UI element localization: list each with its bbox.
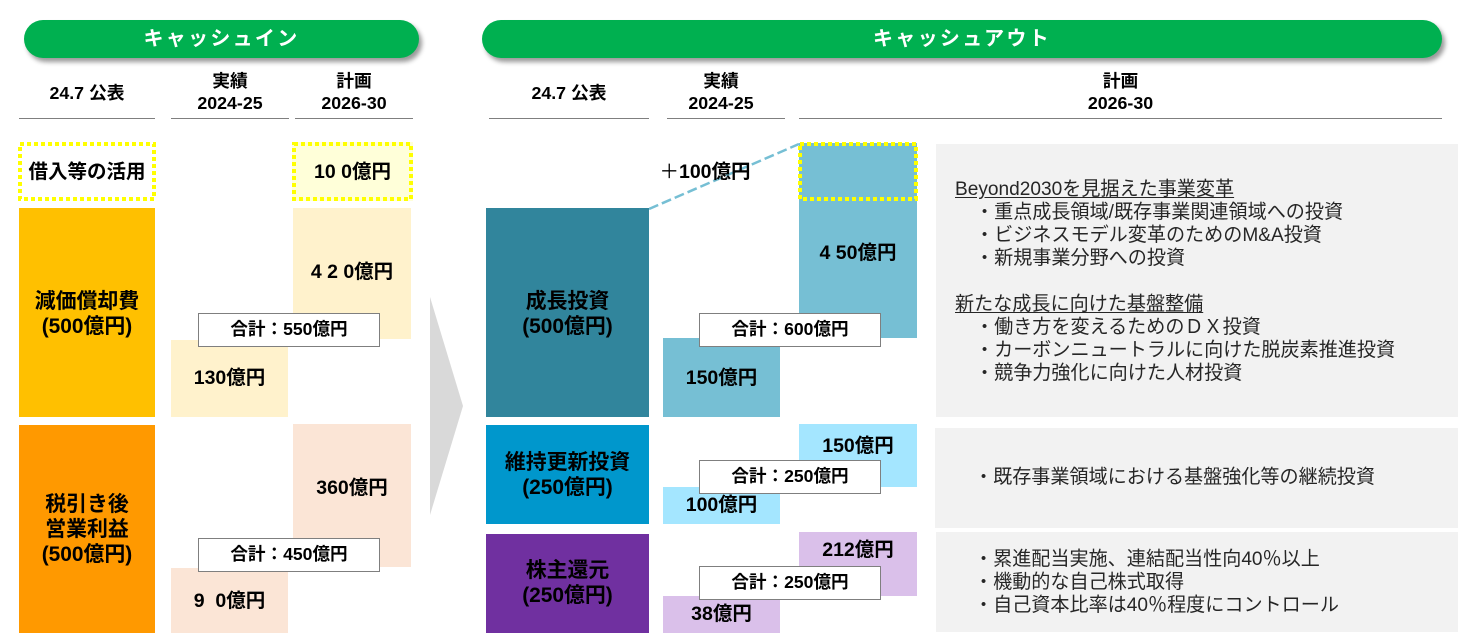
panel: growth investment details	[936, 144, 1458, 417]
maintenance investment block: (250億円)	[522, 476, 613, 498]
text: growth details: ・働き方を変えるためのＤＸ投資	[975, 317, 1261, 338]
depreciation actual 130: 130億円	[194, 367, 265, 389]
maintenance plan 150: 150億円	[822, 435, 894, 457]
depreciation block: 減価償却費	[35, 290, 139, 312]
text: shareholder details: ・機動的な自己株式取得	[974, 572, 1184, 593]
total 250 shareholder: 合計：250億円	[731, 572, 849, 592]
column header: cash in plan: 2026-30	[321, 93, 387, 113]
column header: cash in plan	[321, 71, 387, 113]
total 550: 合計：550億円	[230, 319, 348, 339]
shareholder returns block: (250億円)	[522, 584, 613, 606]
column header: cash in plan: 計画	[336, 71, 372, 91]
maintenance investment block	[486, 425, 649, 524]
operating profit actual 90	[171, 568, 288, 633]
column header: cash in actual: 2024-25	[197, 93, 263, 113]
panel: maintenance details	[935, 428, 1458, 528]
column header: cash in actual: 実績	[212, 71, 248, 91]
total 250 maintenance	[699, 460, 881, 494]
operating profit plan 360: 360億円	[316, 476, 388, 498]
shareholder plan 212: 212億円	[822, 538, 894, 560]
heading: cash in	[24, 20, 419, 58]
growth investment block	[486, 208, 649, 417]
column header: cash out actual: 2024-25	[688, 93, 754, 113]
borrowing plan 100: 10 0億円	[314, 161, 391, 183]
text: maintenance details: ・既存事業領域における基盤強化等の継続投資	[974, 467, 1375, 488]
text: growth details: ・ビジネスモデル変革のためのM&A投資	[975, 225, 1322, 246]
dashed connector	[649, 143, 799, 210]
total 600: 合計：600億円	[731, 319, 849, 339]
depreciation actual 130	[171, 340, 288, 417]
operating profit plan 360	[293, 424, 411, 567]
heading: cash out	[482, 20, 1442, 58]
arrow: cash in to cash out	[430, 298, 463, 514]
text: growth details: Beyond2030を見据えた事業変革	[955, 179, 1234, 200]
operating profit block: 税引き後	[45, 492, 129, 516]
plus 100 label: ＋	[659, 160, 679, 182]
shareholder plan 212	[799, 532, 917, 596]
text: growth details	[955, 178, 1395, 384]
text: growth details: ・重点成長領域/既存事業関連領域への投資	[975, 202, 1343, 223]
total 450	[198, 538, 380, 572]
growth plan 450	[799, 143, 917, 338]
growth investment block: (500億円)	[522, 314, 613, 338]
column header: cash in 24.7 announcement: 24.7 公表	[49, 83, 125, 103]
column header: cash out plan: 2026-30	[1088, 93, 1153, 113]
depreciation block	[19, 208, 155, 417]
total 250 maintenance: 合計：250億円	[731, 466, 849, 486]
panel: shareholder details	[936, 532, 1458, 632]
text: shareholder details: ・累進配当実施、連結配当性向40％以上	[974, 549, 1320, 570]
shareholder returns block: 株主還元	[526, 558, 609, 582]
text: shareholder details: ・自己資本比率は40％程度にコントロール	[974, 595, 1339, 616]
text: shareholder details	[974, 548, 1339, 616]
borrowing label box: 借入等の活用	[28, 161, 146, 183]
text: growth details: ・カーボンニュートラルに向けた脱炭素推進投資	[975, 340, 1395, 361]
plus 100 label: 100億円	[679, 160, 751, 182]
shareholder actual 38: 38億円	[691, 603, 752, 625]
growth plan borrowing highlight	[798, 142, 918, 201]
growth actual 150: 150億円	[686, 367, 757, 389]
total 250 shareholder	[699, 566, 881, 600]
operating profit actual 90: 9 0億円	[194, 590, 265, 612]
heading: cash in: キャッシュイン	[143, 28, 300, 50]
total 550	[198, 313, 380, 347]
maintenance investment block: 維持更新投資	[505, 450, 630, 474]
total 450: 合計：450億円	[230, 544, 348, 564]
column header: cash out 24.7 announcement: 24.7 公表	[531, 83, 607, 103]
column header: cash out actual: 実績	[703, 71, 739, 91]
borrowing plan 100	[292, 142, 413, 201]
total 600	[699, 313, 881, 347]
heading: cash out: キャッシュアウト	[873, 28, 1051, 50]
growth plan 450: 4 50億円	[820, 242, 896, 264]
text: growth details: 新たな成長に向けた基盤整備	[955, 294, 1203, 315]
text: growth details: ・新規事業分野への投資	[975, 248, 1185, 269]
column header: cash out plan: 計画	[1103, 71, 1138, 91]
column header: cash out plan	[1088, 71, 1153, 113]
maintenance actual 100	[663, 487, 780, 524]
maintenance actual 100: 100億円	[686, 494, 757, 516]
depreciation block: (500億円)	[42, 314, 132, 338]
operating profit block: 営業利益	[45, 518, 129, 540]
shareholder actual 38	[663, 596, 780, 633]
depreciation plan 420: 4 2 0億円	[311, 261, 393, 283]
text: growth details: ・競争力強化に向けた人材投資	[975, 363, 1242, 384]
column header: cash out actual	[688, 71, 754, 113]
shareholder returns block	[486, 534, 649, 633]
growth investment block: 成長投資	[526, 290, 609, 312]
borrowing label box	[18, 142, 156, 201]
operating profit block: (500億円)	[42, 542, 132, 566]
maintenance plan 150	[799, 424, 917, 487]
column header: cash in actual	[197, 71, 263, 113]
operating profit block	[19, 425, 155, 633]
depreciation plan 420	[293, 208, 411, 339]
growth actual 150	[663, 338, 780, 417]
